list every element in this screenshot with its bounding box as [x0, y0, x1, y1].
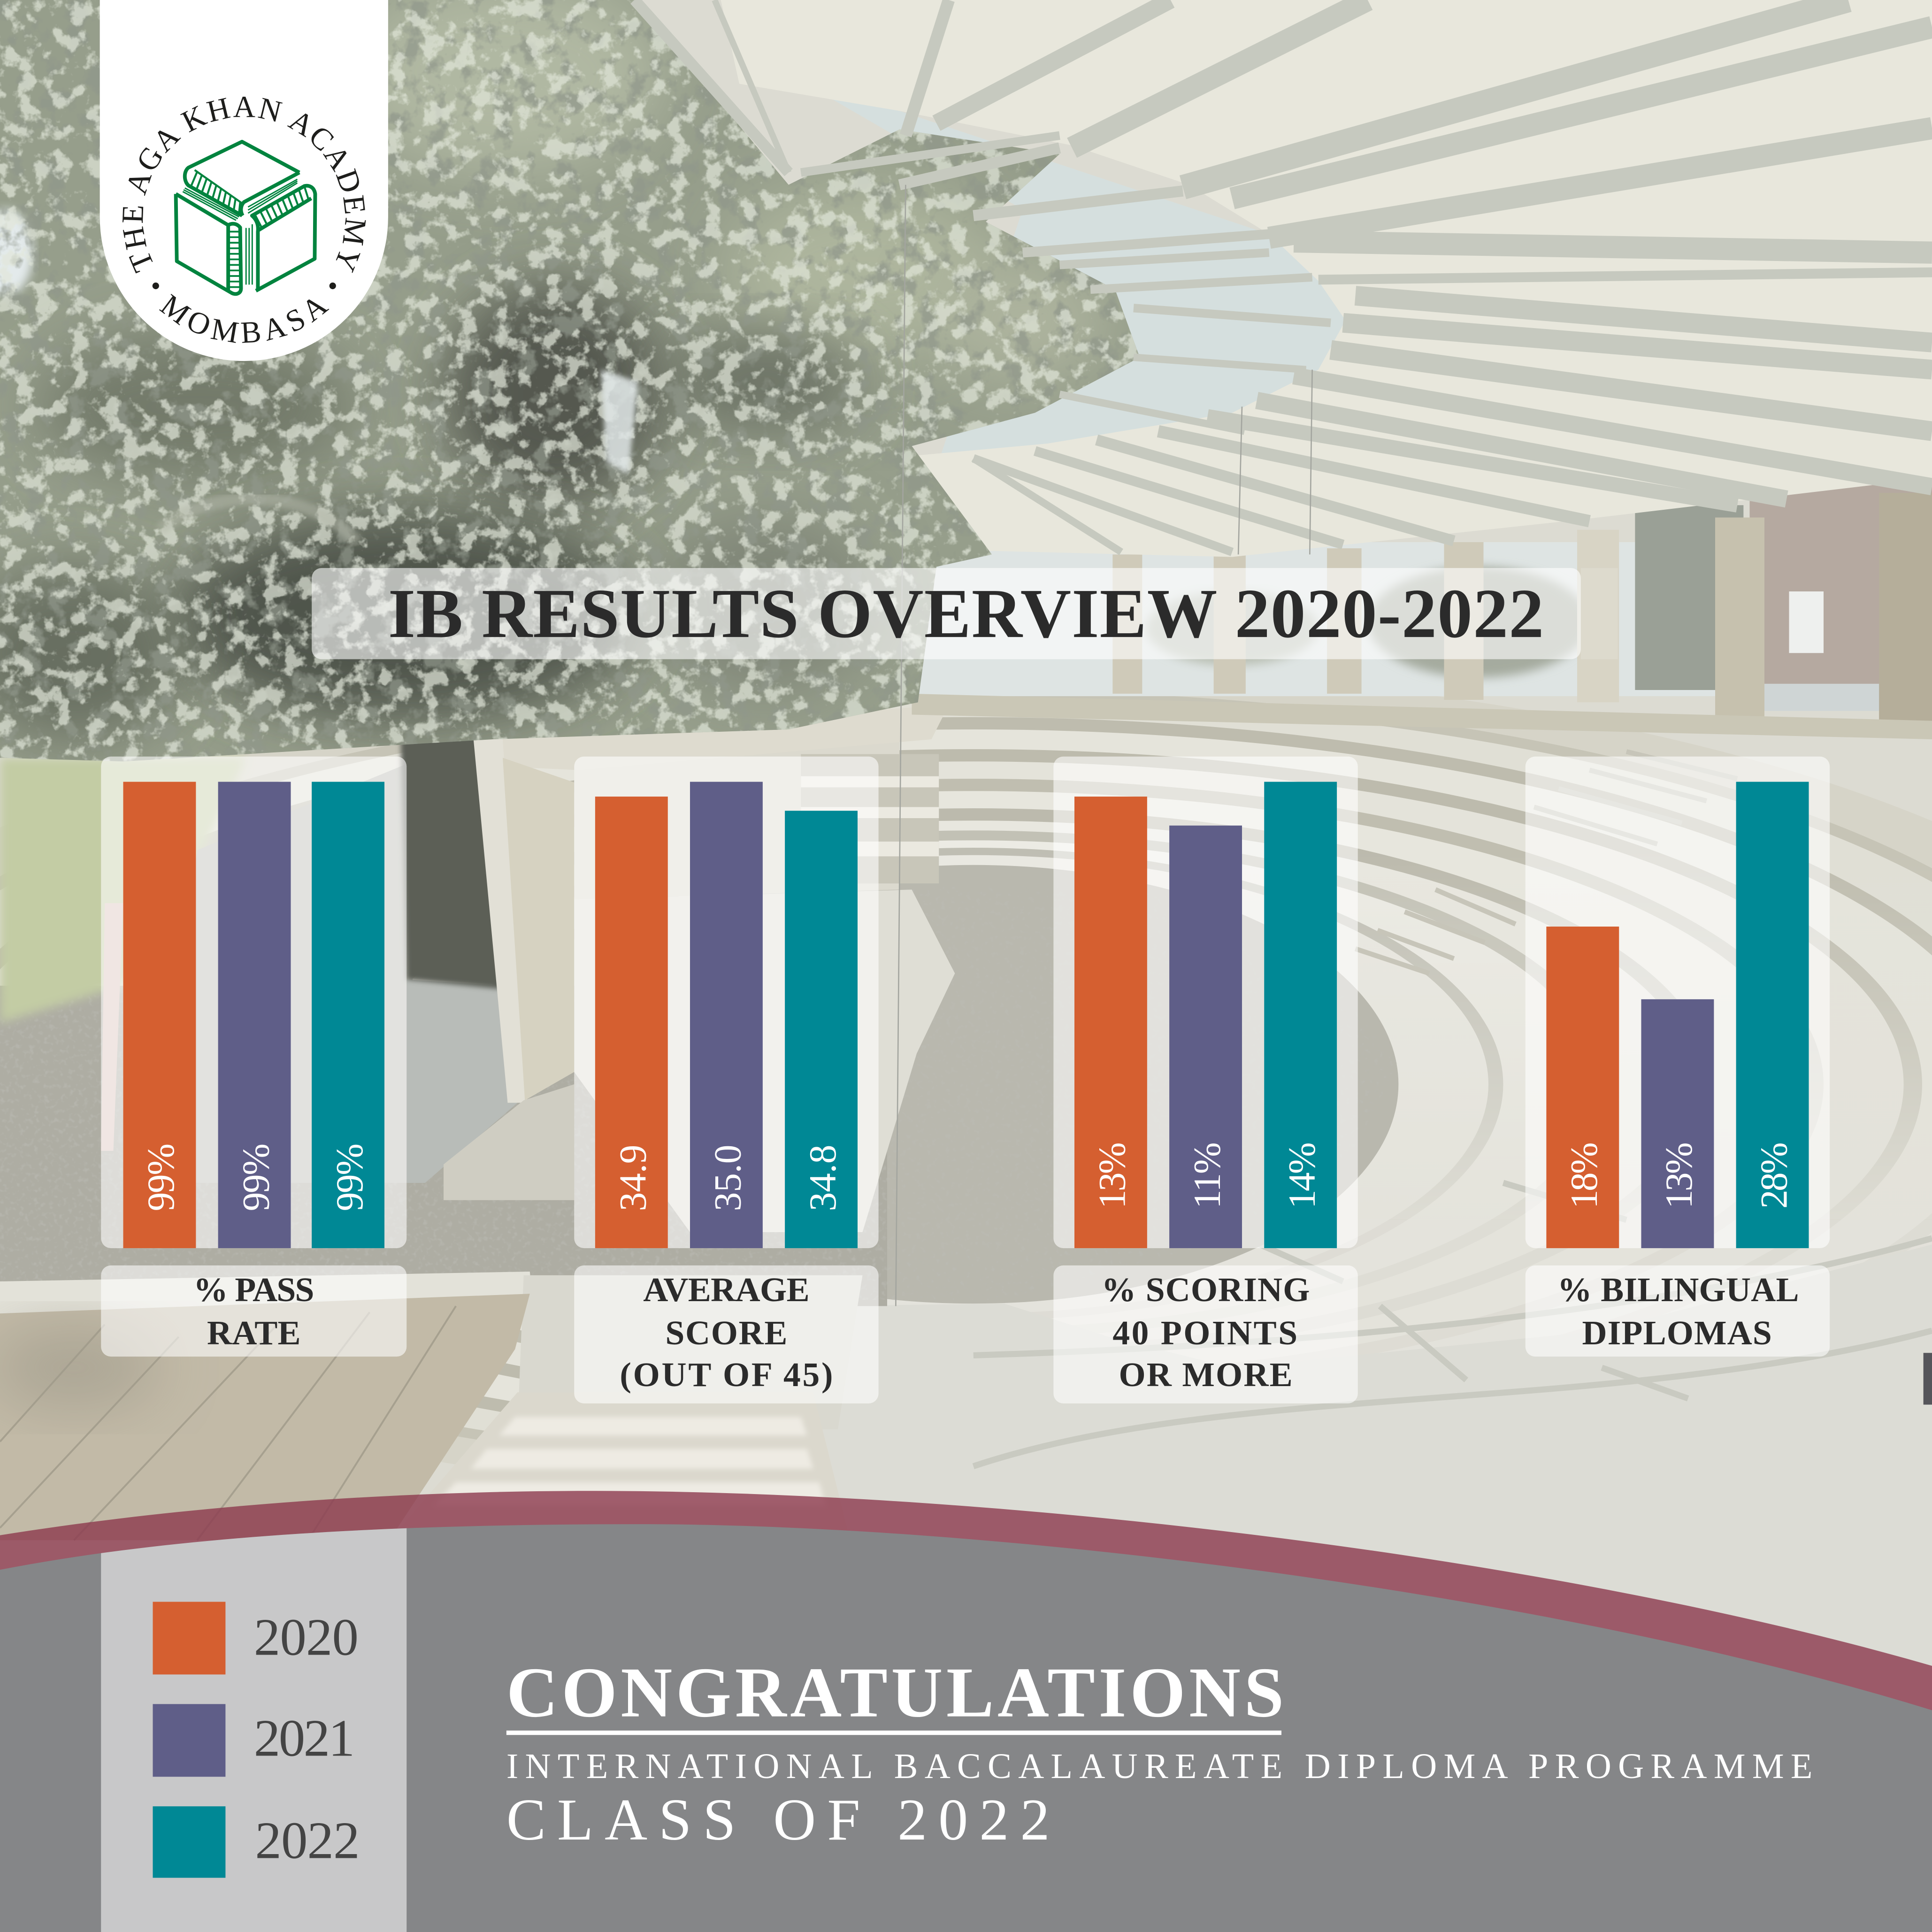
bar: 2020 13%: 13%: [1091, 1142, 1134, 1209]
class of 2022 line: CLASS OF 2022: [506, 1787, 1050, 1853]
label: % scoring 40 points or more: [1053, 1265, 1358, 1403]
photo: concrete path behind panel: [148, 764, 413, 1183]
bar: 2020 99%: [123, 782, 196, 1248]
photo: roof struts: [635, 0, 1932, 552]
legend item: 2020: 2020: [254, 1608, 359, 1666]
chart background: [1526, 757, 1830, 1248]
label: average score: (OUT OF 45): [620, 1356, 833, 1394]
photo: colonnade and stone building: [912, 475, 1932, 739]
bar: 2022 34.8: [785, 811, 858, 1248]
legend item: 2021: [153, 1704, 355, 1777]
label: average score: AVERAGE: [643, 1271, 810, 1309]
photo: ground below rail: [517, 1275, 863, 1429]
photo: central stairs: [390, 1392, 850, 1540]
label: % scoring 40 points or more: 40 POINTS: [1112, 1314, 1297, 1352]
panel: legend: [101, 1479, 406, 1932]
photo: ring fade toward floor: [887, 850, 1932, 1220]
label: % pass rate: [101, 1265, 406, 1357]
bar: 2021 35.0: [690, 782, 763, 1248]
photo: striped barrier: [101, 903, 123, 1151]
legend item: 2022: [153, 1806, 360, 1878]
bar: 2022 99%: [312, 782, 384, 1248]
title: IB RESULTS OVERVIEW 2020-2022: [388, 575, 1544, 652]
photo: concrete under awning: [406, 980, 517, 1183]
bar: 2022 34.8: 34.8: [801, 1145, 844, 1211]
label: % scoring 40 points or more: OR MORE: [1119, 1356, 1293, 1394]
title banner: [312, 568, 1618, 659]
grey footer: [0, 1524, 1932, 1932]
logo: Mombasa: MOMBASA: [154, 288, 334, 350]
title banner faint extension: [1581, 568, 1618, 659]
bar: 2020 34.9: [595, 797, 668, 1248]
photo: interior behind awning: [574, 739, 899, 899]
congratulations heading: CONGRATULATIONS: [506, 1653, 1284, 1732]
photo: amphitheatre seating rings: [0, 666, 1932, 1503]
photo: awning: [444, 705, 949, 1200]
legend item: 2022: 2022: [255, 1811, 360, 1870]
bar: 2021 99%: 99%: [234, 1143, 277, 1211]
bar: 2021 11%: [1169, 826, 1242, 1248]
photo: seating stairs: [1356, 751, 1737, 974]
photo: tree canopy: [0, 0, 1232, 789]
label: % bilingual diplomas: % BILINGUAL: [1557, 1271, 1799, 1309]
bar: 2021 99%: [218, 782, 291, 1248]
panel: % bilingual diplomas chart: [1526, 757, 1830, 1248]
bar: 2022 14%: 14%: [1280, 1142, 1323, 1209]
chart background: [574, 757, 879, 1248]
label: % pass rate: RATE: [207, 1314, 300, 1352]
bar: 2020 13%: [1074, 797, 1147, 1248]
legend background: [101, 1479, 406, 1932]
legend item: 2021: 2021: [254, 1709, 355, 1768]
panel: % scoring 40 points chart: [1053, 757, 1358, 1248]
panel: average score chart: [574, 757, 879, 1248]
photo: paved floor: [813, 1244, 1932, 1725]
label: % scoring 40 points or more: % SCORING: [1102, 1271, 1310, 1309]
bar: 2020 18%: 18%: [1563, 1142, 1605, 1209]
photo: bench object: [1924, 1353, 1932, 1404]
logo: three books icon: [176, 142, 315, 294]
photo: rail band: [0, 1272, 532, 1316]
photo: ring fade lower: [887, 1220, 1932, 1466]
photo: roof membrane: [721, 0, 1932, 557]
photo: hanging wires: [896, 185, 1312, 1306]
chart background: [101, 757, 406, 1248]
photo: steps right of awning: [801, 754, 939, 883]
chart background: [1053, 757, 1358, 1248]
bar: 2020 18%: [1546, 927, 1619, 1248]
bar: 2021 35.0: 35.0: [706, 1145, 749, 1211]
photo: sky opening: [789, 74, 1349, 468]
panel: % pass rate chart: [101, 757, 406, 1248]
bar: 2022 28%: 28%: [1752, 1142, 1795, 1209]
programme line: INTERNATIONAL BACCALAUREATE DIPLOMA PROGRAMME: [506, 1747, 1812, 1786]
bar: 2020 34.9: 34.9: [611, 1145, 654, 1211]
logo: circular school name: THE AGA KHAN ACADEMY: [116, 90, 373, 276]
photo: stone stair wall: [0, 1294, 530, 1540]
title banner background: [312, 568, 1581, 659]
label: average score: [574, 1265, 879, 1403]
legend item: 2020: [153, 1602, 359, 1674]
bar: 2021 11%: 11%: [1186, 1142, 1228, 1209]
photo: sand ground: [0, 863, 1417, 1319]
photo: concrete stage block: [574, 889, 955, 1232]
label: % pass rate: % PASS: [193, 1271, 314, 1309]
bar: 2020 99%: 99%: [139, 1143, 182, 1211]
bar: 2022 28%: [1736, 782, 1809, 1248]
photo: tree trunk: [400, 727, 505, 989]
photo: grass lawn: [0, 758, 246, 1023]
photo: paving lines: [974, 1183, 1932, 1466]
bar: 2021 13%: 13%: [1657, 1142, 1700, 1209]
bar: 2022 14%: [1264, 782, 1337, 1248]
logo tab: [100, 0, 388, 361]
bar: 2022 99%: 99%: [328, 1143, 371, 1211]
bar: 2021 13%: [1641, 999, 1714, 1248]
logo: dots: [153, 283, 336, 289]
label: % bilingual diplomas: DIPLOMAS: [1582, 1314, 1772, 1352]
logo tab background: [100, 0, 388, 361]
label: average score: SCORE: [666, 1314, 787, 1352]
maroon wave band: [0, 1491, 1932, 1725]
label: % bilingual diplomas: [1526, 1265, 1830, 1357]
